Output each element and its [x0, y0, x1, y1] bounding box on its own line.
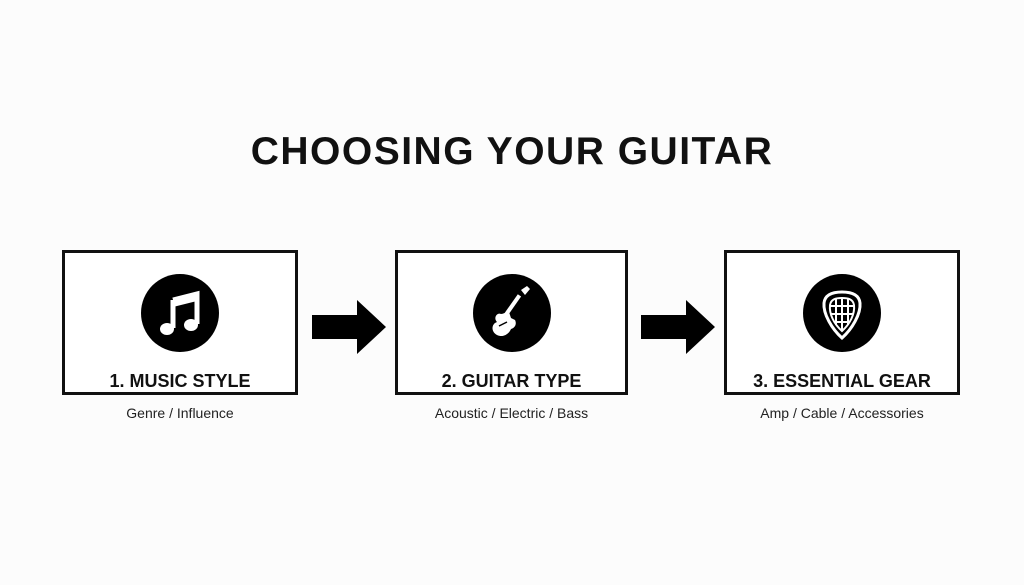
panel: music style — [62, 250, 298, 395]
subtitle 3: Amp / Cable / Accessories — [760, 405, 924, 421]
label: 2. GUITAR TYPE — [442, 371, 581, 391]
arrow 1 — [312, 300, 386, 354]
icon: guitar — [472, 274, 550, 352]
subtitle 1: Genre / Influence — [126, 405, 234, 421]
label: 1. MUSIC STYLE — [109, 371, 251, 391]
panel: guitar type — [395, 250, 628, 395]
subtitle 2: Acoustic / Electric / Bass — [435, 405, 588, 421]
label: 3. ESSENTIAL GEAR — [753, 371, 931, 391]
arrow 2 — [641, 300, 715, 354]
panel: essential gear — [724, 250, 960, 395]
icon: guitar pick — [803, 274, 881, 352]
title: CHOOSING YOUR GUITAR — [251, 130, 773, 173]
icon: music note — [141, 274, 219, 352]
